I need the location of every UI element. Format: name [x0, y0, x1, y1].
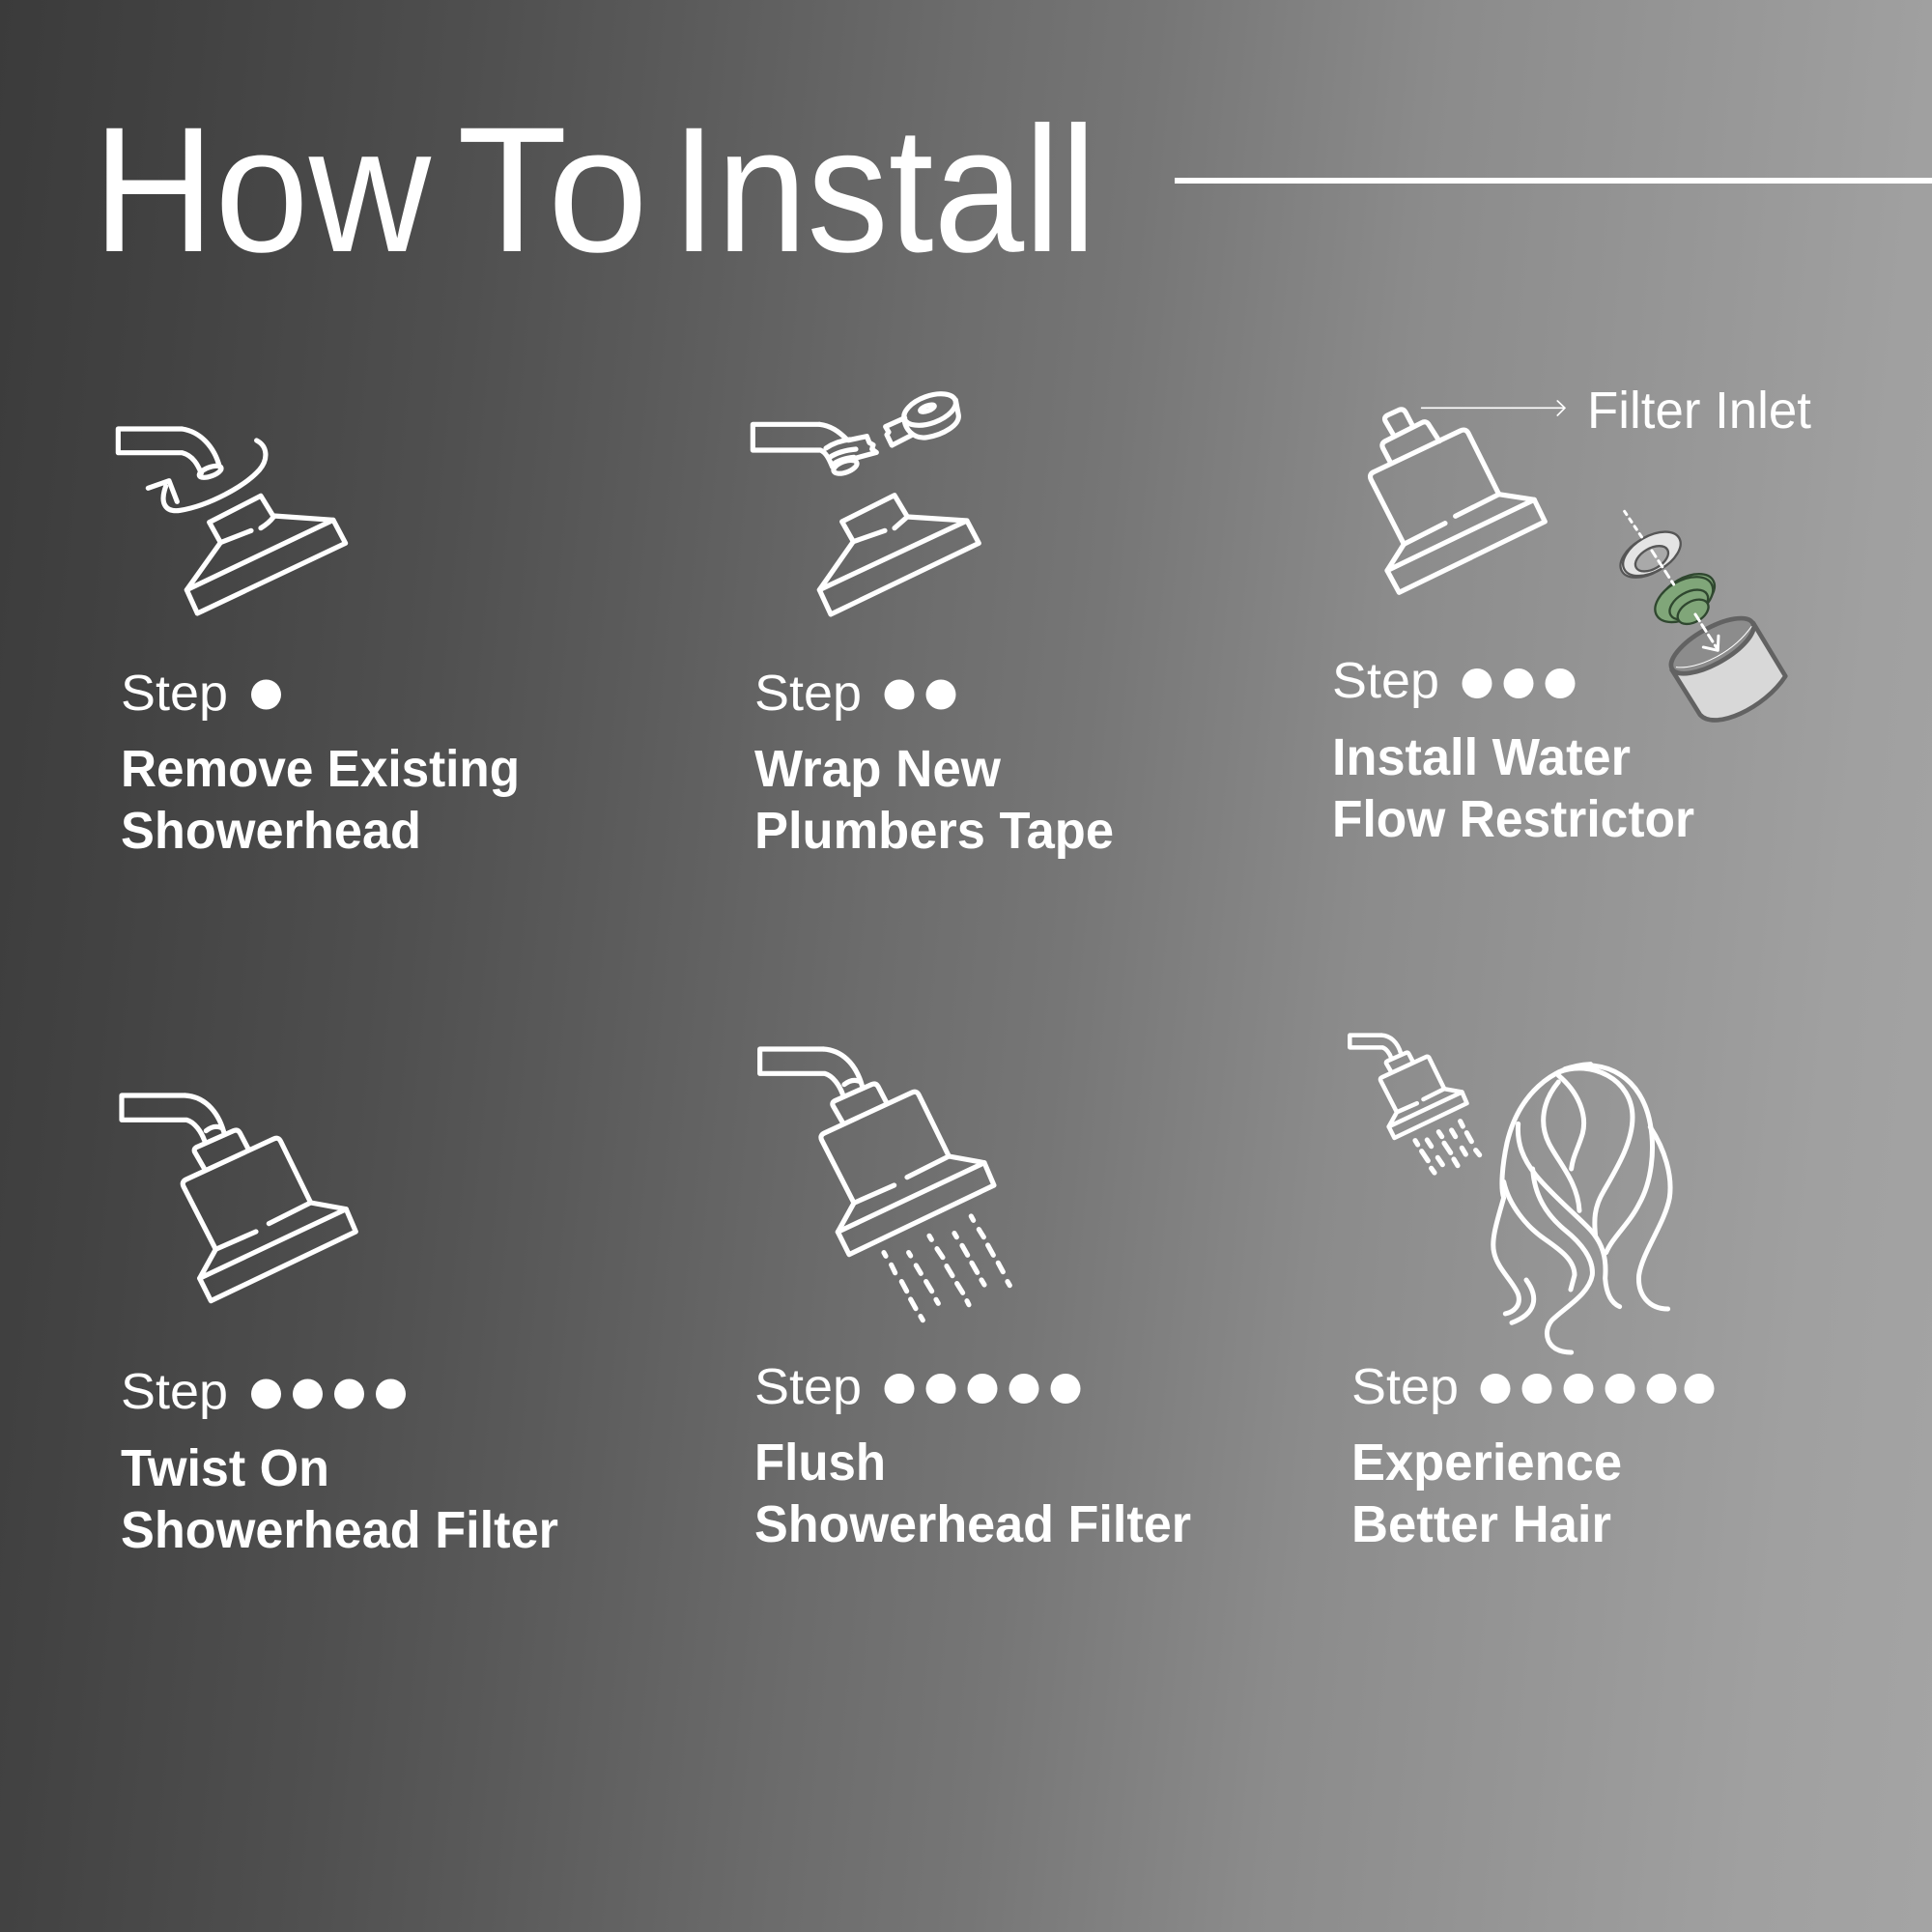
title rule [1175, 178, 1932, 184]
heading: Flush [754, 1434, 886, 1492]
heading: Wrap New [754, 740, 1002, 798]
washer [1613, 523, 1688, 586]
heading: Install Water [1332, 728, 1631, 786]
icon: flow restrictor parts [1613, 511, 1785, 720]
step dots [251, 680, 281, 709]
title: To [457, 91, 648, 290]
step dots [885, 1374, 1080, 1404]
callout: filter inlet: Filter Inlet [1587, 382, 1811, 440]
heading: Experience [1351, 1434, 1622, 1492]
arrow: filter inlet [1422, 401, 1565, 415]
icon: hair [1493, 1065, 1670, 1352]
heading: Remove Existing [121, 740, 520, 798]
title: Install [671, 91, 1096, 290]
step dots [885, 680, 956, 709]
panel: step 5 [754, 1049, 1191, 1553]
panel: step 3 [1332, 382, 1811, 848]
icon: showerhead with filter [122, 1095, 355, 1301]
heading line 2: Better Hair [1351, 1495, 1611, 1553]
step dots [1480, 1374, 1714, 1404]
panel: step 6 [1350, 1036, 1714, 1553]
heading line 2: Showerhead [121, 802, 421, 860]
panel: step 1 [118, 429, 520, 860]
icon: plumbers tape [753, 387, 979, 614]
step label: Step [754, 666, 862, 722]
filter cup [1663, 608, 1785, 720]
icon: small shower [1350, 1036, 1480, 1173]
step label: Step [1351, 1359, 1459, 1415]
step label: Step [121, 666, 228, 722]
panel: step 4 [121, 1095, 558, 1559]
title: How [93, 91, 432, 290]
heading line 2: Showerhead Filter [754, 1495, 1191, 1553]
icon: removing showerhead [118, 429, 346, 613]
panel: step 2 [753, 387, 1114, 860]
icon: filter head [1371, 410, 1545, 592]
step dots [1463, 668, 1575, 698]
step label: Step [121, 1364, 228, 1420]
heading line 2: Showerhead Filter [121, 1501, 558, 1559]
step dots [251, 1379, 406, 1408]
step label: Step [754, 1359, 862, 1415]
dashed insertion arrow [1625, 511, 1719, 650]
heading: Twist On [121, 1439, 329, 1497]
heading line 2: Plumbers Tape [754, 802, 1114, 860]
heading line 2: Flow Restrictor [1332, 790, 1694, 848]
title [93, 91, 1096, 290]
step label: Step [1332, 653, 1439, 709]
green restrictor [1647, 565, 1722, 632]
icon: flushing showerhead [760, 1049, 1009, 1321]
